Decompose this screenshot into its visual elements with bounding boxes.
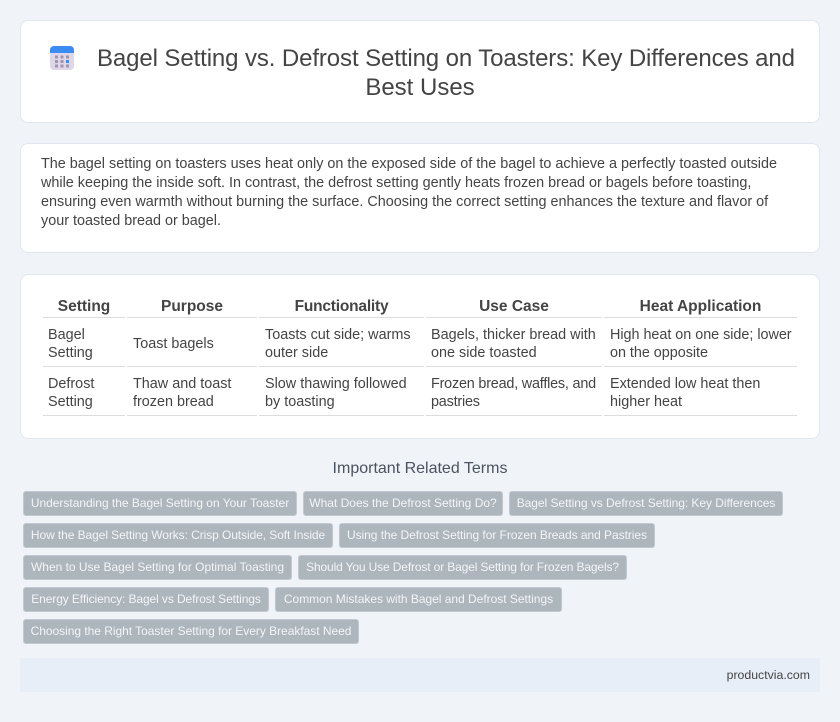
comparison table (43, 298, 797, 416)
related terms chips: Energy Efficiency: Bagel vs Defrost Settings (31, 592, 261, 606)
related terms chips: When to Use Bagel Setting for Optimal Toasting (31, 560, 284, 574)
related terms chips: Bagel Setting vs Defrost Setting: Key Differences (517, 496, 775, 510)
text block: introduction: The bagel setting on toasters uses heat only on the exposed side of the bagel to achieve a perfectly toasted outside (41, 156, 777, 172)
panel: comparison table card (20, 274, 820, 439)
comparison table: Defrost (48, 376, 94, 392)
panel: intro text card (20, 143, 820, 253)
comparison table: Setting (48, 345, 93, 361)
related terms chips: Common Mistakes with Bagel and Defrost Settings (284, 592, 553, 606)
related terms chips (23, 491, 783, 644)
related terms chips: Choosing the Right Toaster Setting for Every Breakfast Need (31, 624, 351, 638)
comparison table: Frozen bread, waffles, and (431, 376, 596, 392)
comparison table: Use Case (479, 298, 549, 315)
related terms chips: Understanding the Bagel Setting on Your Toaster (31, 496, 289, 510)
comparison table: Thaw and toast (133, 376, 231, 392)
comparison table: Slow thawing followed (265, 376, 407, 392)
text block: introduction: while keeping the inside soft. In contrast, the defrost setting gently heats frozen bread or bagels before toasting, (41, 175, 751, 191)
comparison table: Functionality (295, 298, 388, 315)
comparison table: Toasts cut side; warms (265, 327, 411, 343)
comparison table: frozen bread (133, 394, 214, 410)
panel: title card (20, 20, 820, 123)
related terms chips: Using the Defrost Setting for Frozen Breads and Pastries (347, 528, 647, 542)
title: Best Uses (365, 74, 475, 101)
comparison table: one side toasted (431, 345, 537, 361)
comparison table: pastries (431, 394, 480, 410)
comparison table: Setting (58, 298, 110, 315)
comparison table: Purpose (161, 298, 223, 315)
comparison table: Heat Application (640, 298, 761, 315)
comparison table: Bagel (48, 327, 85, 343)
heading: important related terms: Important Related Terms (333, 460, 507, 477)
comparison table: on the opposite (610, 345, 708, 361)
comparison table: higher heat (610, 394, 682, 410)
related terms chips: What Does the Defrost Setting Do? (309, 496, 497, 510)
title (97, 45, 795, 101)
text block: introduction (41, 156, 777, 229)
title: Bagel Setting vs. Defrost Setting on Toasters: Key Differences and (97, 45, 795, 72)
icon: calendar (50, 46, 74, 70)
comparison table: by toasting (265, 394, 335, 410)
comparison table: Setting (48, 394, 93, 410)
comparison table: Toast bagels (133, 336, 214, 352)
comparison table: outer side (265, 345, 328, 361)
comparison table: Bagels, thicker bread with (431, 327, 596, 343)
text block: introduction: ensuring even warmth without burning the surface. Choosing the correct setting enhances the texture and flavor of (41, 194, 768, 210)
comparison table: Extended low heat then (610, 376, 760, 392)
related terms chips: How the Bagel Setting Works: Crisp Outside, Soft Inside (31, 528, 325, 542)
comparison table: High heat on one side; lower (610, 327, 792, 343)
footer source text: productvia.com (727, 668, 810, 682)
footer bar (20, 658, 820, 692)
related terms chips: Should You Use Defrost or Bagel Setting for Frozen Bagels? (306, 560, 619, 574)
text block: introduction: your toasted bread or bagel. (41, 213, 221, 229)
